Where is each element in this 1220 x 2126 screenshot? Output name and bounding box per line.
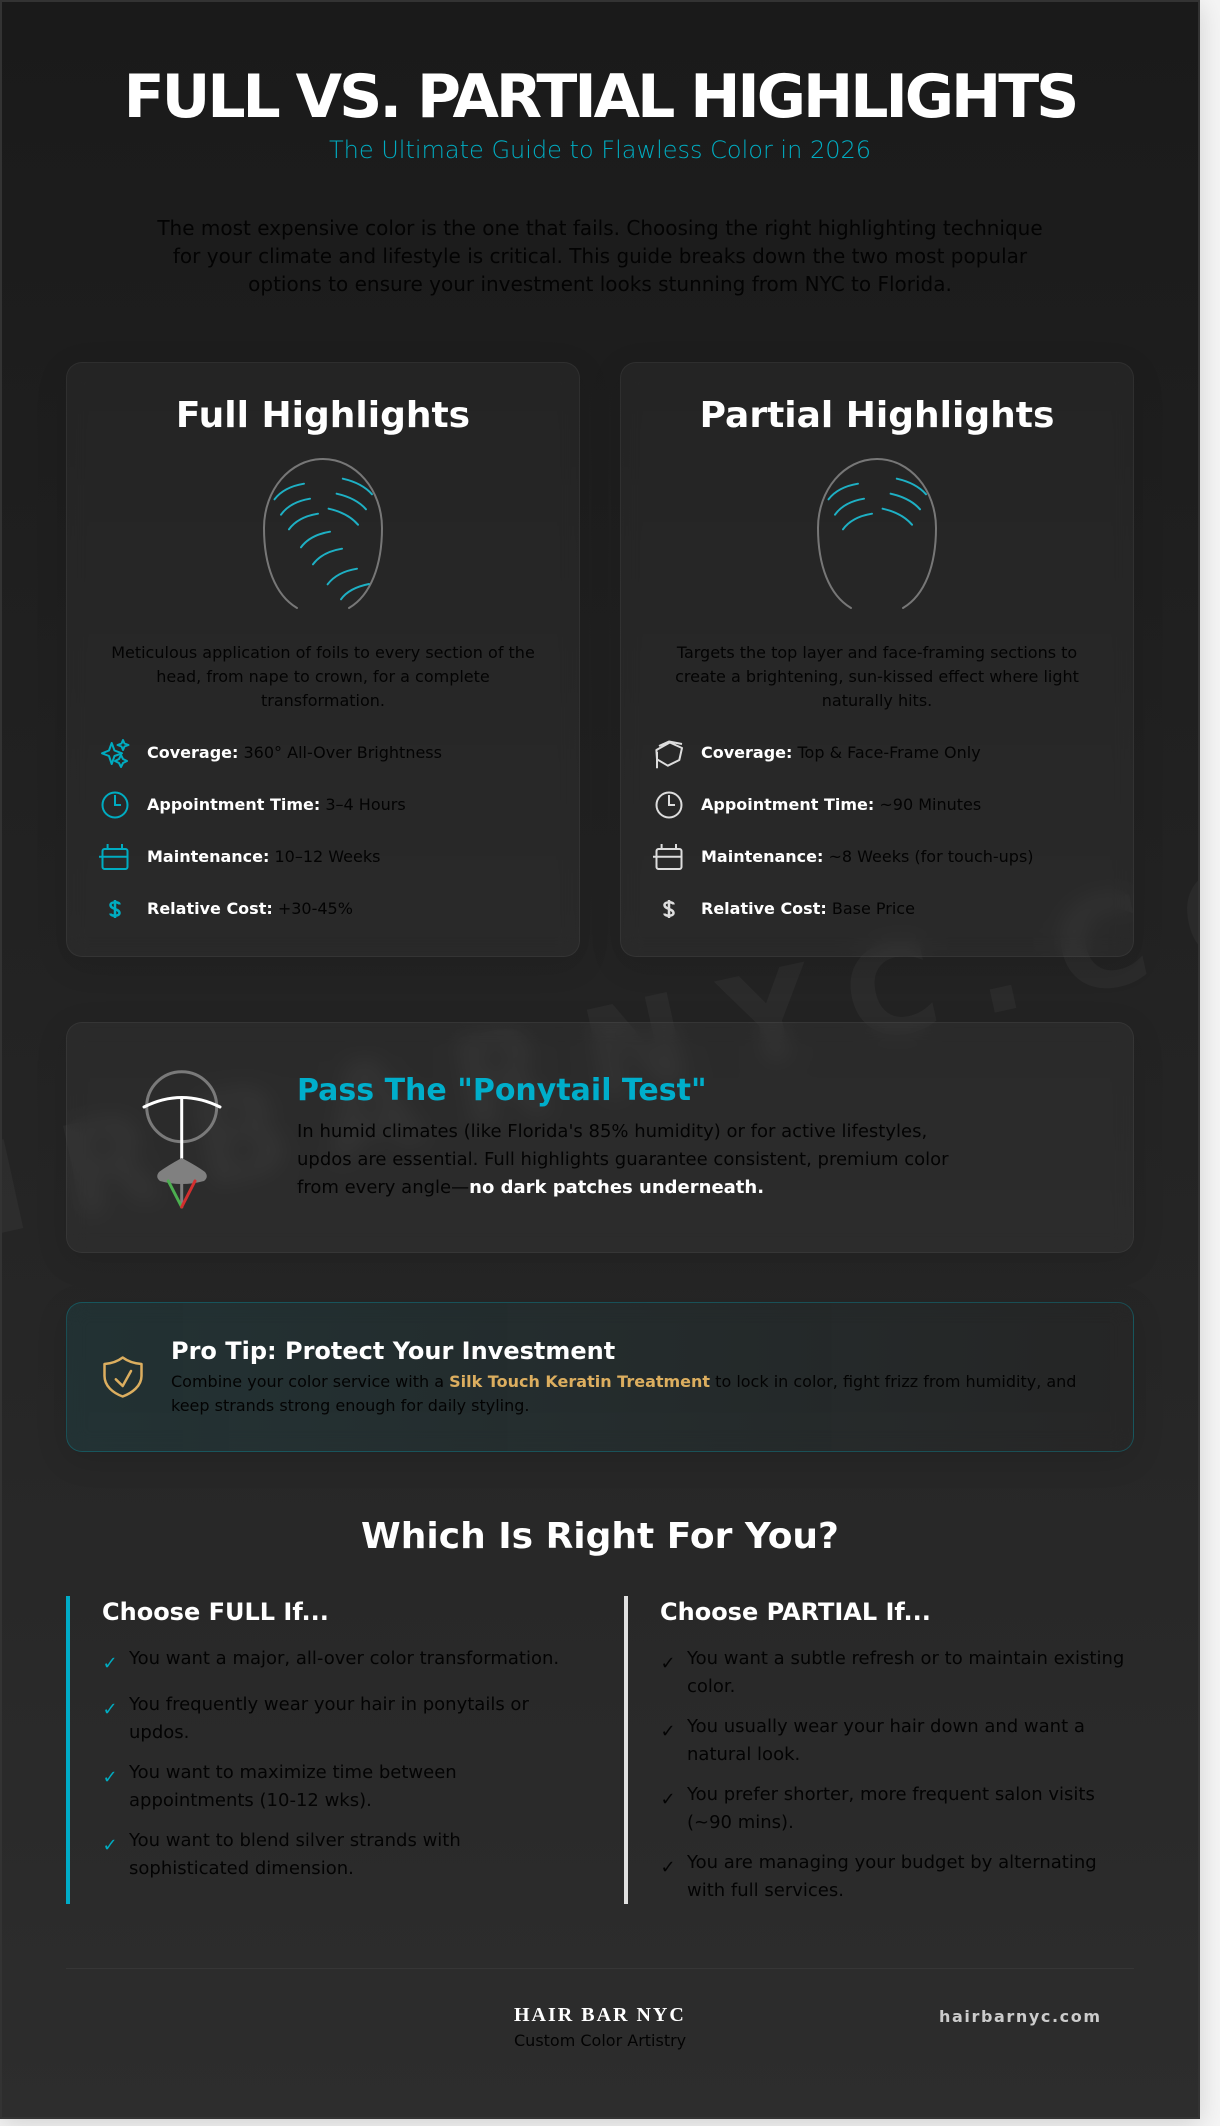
accent bar — [66, 1596, 70, 1904]
checklist item: You frequently wear your hair in ponytails or — [129, 1694, 529, 1714]
icon: shield check — [103, 1356, 143, 1398]
checklist item: color. — [687, 1676, 735, 1696]
check mark: ✓ — [660, 1653, 676, 1674]
feature: maintenance: Maintenance: ~8 Weeks (for touch-ups) — [701, 846, 1034, 866]
column: choose partial — [624, 1596, 1124, 1904]
accent bar — [624, 1596, 628, 1904]
check mark: ✓ — [102, 1835, 118, 1856]
checklist item: You are managing your budget by alternating — [687, 1852, 1097, 1872]
subtitle: The Ultimate Guide to Flawless Color in 2026 — [329, 136, 871, 164]
checklist item: natural look. — [687, 1744, 800, 1764]
feature: relative cost: Relative Cost: +30-45% — [147, 898, 353, 918]
footer tagline: Custom Color Artistry — [514, 2031, 686, 2050]
check mark: ✓ — [102, 1653, 118, 1674]
check mark: ✓ — [660, 1789, 676, 1810]
checklist item — [129, 1762, 457, 1810]
check mark: ✓ — [660, 1857, 676, 1878]
icon: head with partial highlights — [817, 458, 937, 609]
checklist item: You want a major, all-over color transformation. — [129, 1648, 559, 1668]
pro tip body text: Combine your color service with a Silk Touch Keratin Treatment to lock in color, fight frizz from humidity, and — [171, 1372, 1076, 1391]
checklist item: You want to blend silver strands with — [129, 1830, 461, 1850]
checklist item: You want to maximize time between — [129, 1762, 457, 1782]
intro text: options to ensure your investment looks stunning from NYC to Florida. — [248, 272, 952, 296]
panel: full highlights — [66, 362, 580, 957]
full highlights description — [111, 642, 535, 710]
column heading: Choose FULL If... — [102, 1598, 329, 1626]
icon: head with full highlights — [263, 458, 383, 609]
panel: ponytail test — [66, 1022, 1134, 1253]
footer website: hairbarnyc.com — [939, 2007, 1102, 2026]
footer divider — [66, 1968, 1134, 1969]
section heading: Which Is Right For You? — [361, 1516, 839, 1557]
checklist item: sophisticated dimension. — [129, 1858, 354, 1878]
partial highlights description: create a brightening, sun-kissed effect where light — [675, 666, 1079, 686]
icon: dollar — [109, 900, 121, 918]
checklist item — [129, 1694, 529, 1742]
full highlights description: transformation. — [261, 690, 385, 710]
partial highlights description: naturally hits. — [822, 690, 932, 710]
checklist item — [687, 1648, 1124, 1696]
feature: appointment time: Appointment Time: 3–4 Hours — [147, 794, 406, 814]
icon: coverage hexagon — [655, 740, 683, 768]
panel heading: partial highlights: Partial Highlights — [700, 394, 1054, 436]
checklist item: You usually wear your hair down and want a — [687, 1716, 1085, 1736]
feature: relative cost: Relative Cost: Base Price — [701, 898, 915, 918]
feature: appointment time: Appointment Time: ~90 Minutes — [701, 794, 981, 814]
icon: calendar — [99, 844, 128, 870]
partial highlights description — [675, 642, 1079, 710]
icon: dollar — [663, 900, 675, 918]
feature: coverage: Coverage: 360° All-Over Brightness — [147, 742, 442, 762]
icon: clock — [102, 792, 128, 818]
full highlights description: Meticulous application of foils to every section of the — [111, 642, 535, 662]
feature: coverage: Coverage: Top & Face-Frame Only — [701, 742, 981, 762]
intro text: for your climate and lifestyle is critical. This guide breaks down the two most popular — [173, 244, 1027, 268]
ponytail body text — [297, 1121, 949, 1198]
icon: calendar — [653, 844, 682, 870]
ponytail heading: Pass The "Ponytail Test" — [297, 1073, 707, 1108]
panel: pro tip — [66, 1302, 1134, 1452]
check mark: ✓ — [102, 1767, 118, 1788]
checklist item: (~90 mins). — [687, 1812, 794, 1832]
icon: ponytail — [142, 1070, 222, 1209]
checklist item: You prefer shorter, more frequent salon visits — [687, 1784, 1095, 1804]
checklist item — [687, 1852, 1097, 1900]
footer brand: HAIR BAR NYC — [514, 2004, 686, 2026]
checklist item: You want a subtle refresh or to maintain existing — [687, 1648, 1124, 1668]
feature: maintenance: Maintenance: 10–12 Weeks — [147, 846, 380, 866]
panel heading: full highlights: Full Highlights — [176, 394, 470, 436]
pro tip heading: Pro Tip: Protect Your Investment — [171, 1337, 615, 1365]
intro text — [157, 216, 1043, 296]
check mark: ✓ — [102, 1699, 118, 1720]
ponytail body text: updos are essential. Full highlights guarantee consistent, premium color — [297, 1149, 949, 1170]
checklist item — [687, 1784, 1095, 1832]
partial highlights description: Targets the top layer and face-framing sections to — [677, 642, 1077, 662]
checklist item: with full services. — [687, 1880, 844, 1900]
column heading: Choose PARTIAL If... — [660, 1598, 931, 1626]
pro tip body text: keep strands strong enough for daily styling. — [171, 1396, 529, 1415]
column: choose full — [66, 1596, 559, 1904]
checklist item: updos. — [129, 1722, 189, 1742]
ponytail body text: In humid climates (like Florida's 85% humidity) or for active lifestyles, — [297, 1121, 927, 1142]
full highlights description: head, from nape to crown, for a complete — [156, 666, 490, 686]
ponytail body text: from every angle—no dark patches underneath. — [297, 1177, 764, 1198]
pro tip body text — [171, 1372, 1076, 1415]
panel: partial highlights — [620, 362, 1134, 957]
title: FULL VS. PARTIAL HIGHLIGHTS — [124, 62, 1076, 132]
check mark: ✓ — [660, 1721, 676, 1742]
checklist item — [129, 1830, 461, 1878]
intro text: The most expensive color is the one that fails. Choosing the right highlighting technique — [157, 216, 1043, 240]
checklist item — [687, 1716, 1085, 1764]
icon: clock — [656, 792, 682, 818]
icon: sparkles — [101, 739, 130, 768]
checklist item: appointments (10-12 wks). — [129, 1790, 372, 1810]
